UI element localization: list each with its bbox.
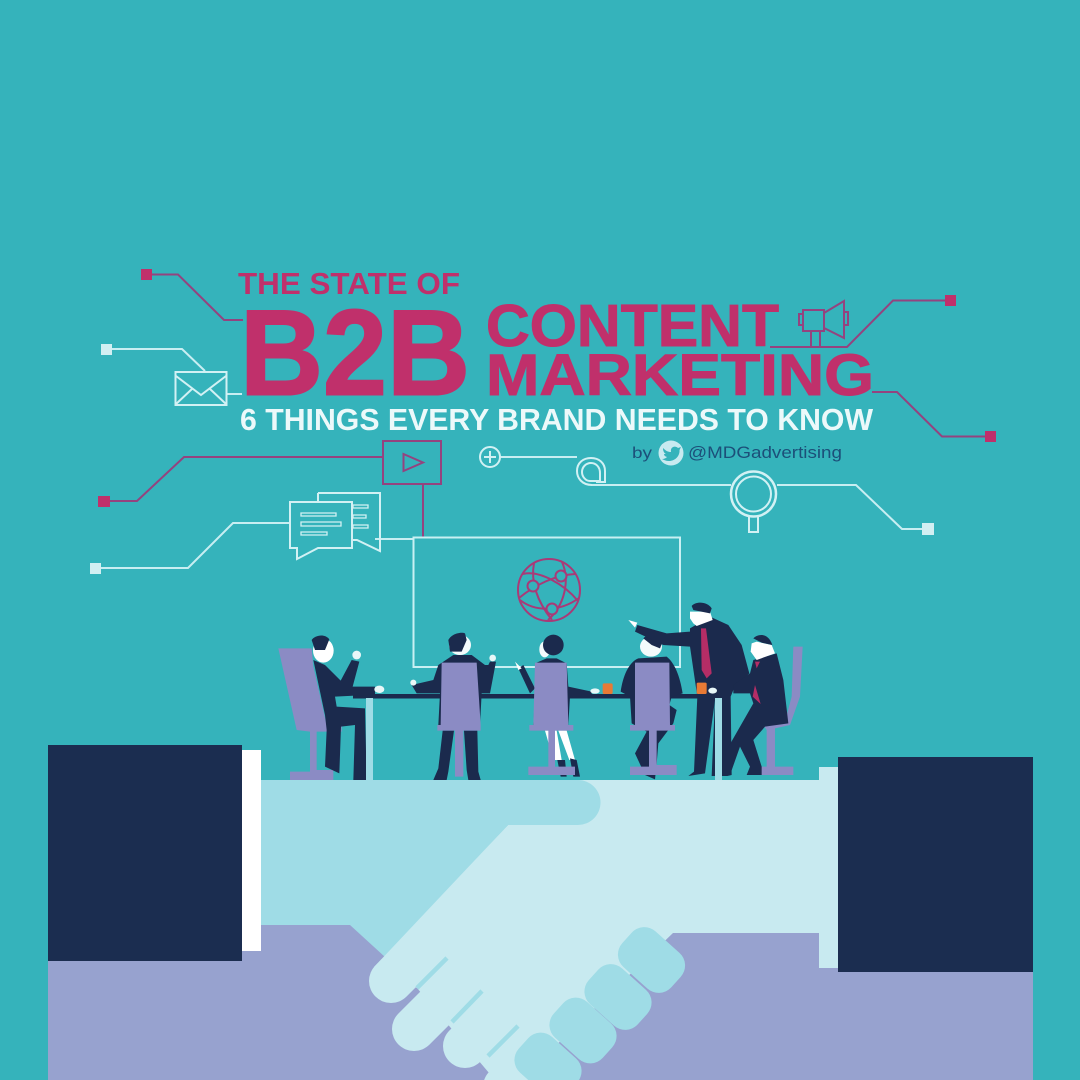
- icon: video play: [383, 441, 441, 484]
- person: man seen from behind: [410, 633, 496, 780]
- subtitle: 6 THINGS EVERY BRAND NEEDS TO KNOW: [240, 403, 873, 437]
- byline word: by: [632, 445, 652, 462]
- byline: [632, 440, 842, 466]
- title line: the state of: THE STATE OF: [238, 267, 460, 301]
- presentation screen: [414, 538, 680, 667]
- purple sleeves: [48, 925, 1033, 1080]
- right cuff: [819, 757, 1033, 972]
- connector: plus to magnifier: [500, 457, 934, 535]
- left hand palm: [261, 780, 600, 957]
- conference table top: [353, 694, 723, 698]
- title line: B2B: B2B: [240, 284, 470, 420]
- icon: envelope: [176, 372, 226, 405]
- title line: content: CONTENT: [486, 292, 779, 359]
- connector: envelope line: [101, 344, 242, 394]
- connector: play icon line: [98, 457, 423, 537]
- left table leg: [366, 698, 373, 780]
- left thumb tip: [500, 780, 601, 833]
- connector: bottom right crimson: [872, 392, 996, 442]
- icon: magnifying glass: [731, 472, 776, 532]
- byline handle: @MDGadvertising: [688, 443, 842, 462]
- title line: marketing: MARKETING: [486, 343, 874, 408]
- title: [238, 267, 874, 420]
- icon: chat bubbles: [290, 493, 380, 559]
- person: seated man right: [720, 635, 803, 775]
- connector: top right crimson: [770, 295, 956, 347]
- person: seated man left: [278, 635, 384, 780]
- icon: network globe: [518, 559, 580, 621]
- left hand fingers gripping: [417, 920, 692, 1080]
- person: woman seen from behind: [515, 635, 613, 777]
- icon: twitter bird: [658, 440, 684, 466]
- connector: top left crimson: [141, 269, 243, 320]
- right table leg: [715, 698, 722, 780]
- connector: chat line: [90, 523, 413, 574]
- right hand and fingers: [374, 780, 819, 1080]
- icon: megaphone: [799, 301, 848, 346]
- icon: plus circle: [480, 447, 500, 467]
- handshake: [48, 745, 1033, 1080]
- person: standing presenter: [628, 603, 749, 776]
- person: man at table from behind: [621, 634, 683, 779]
- left cuff: [48, 745, 261, 961]
- icon: at sign: [577, 458, 605, 485]
